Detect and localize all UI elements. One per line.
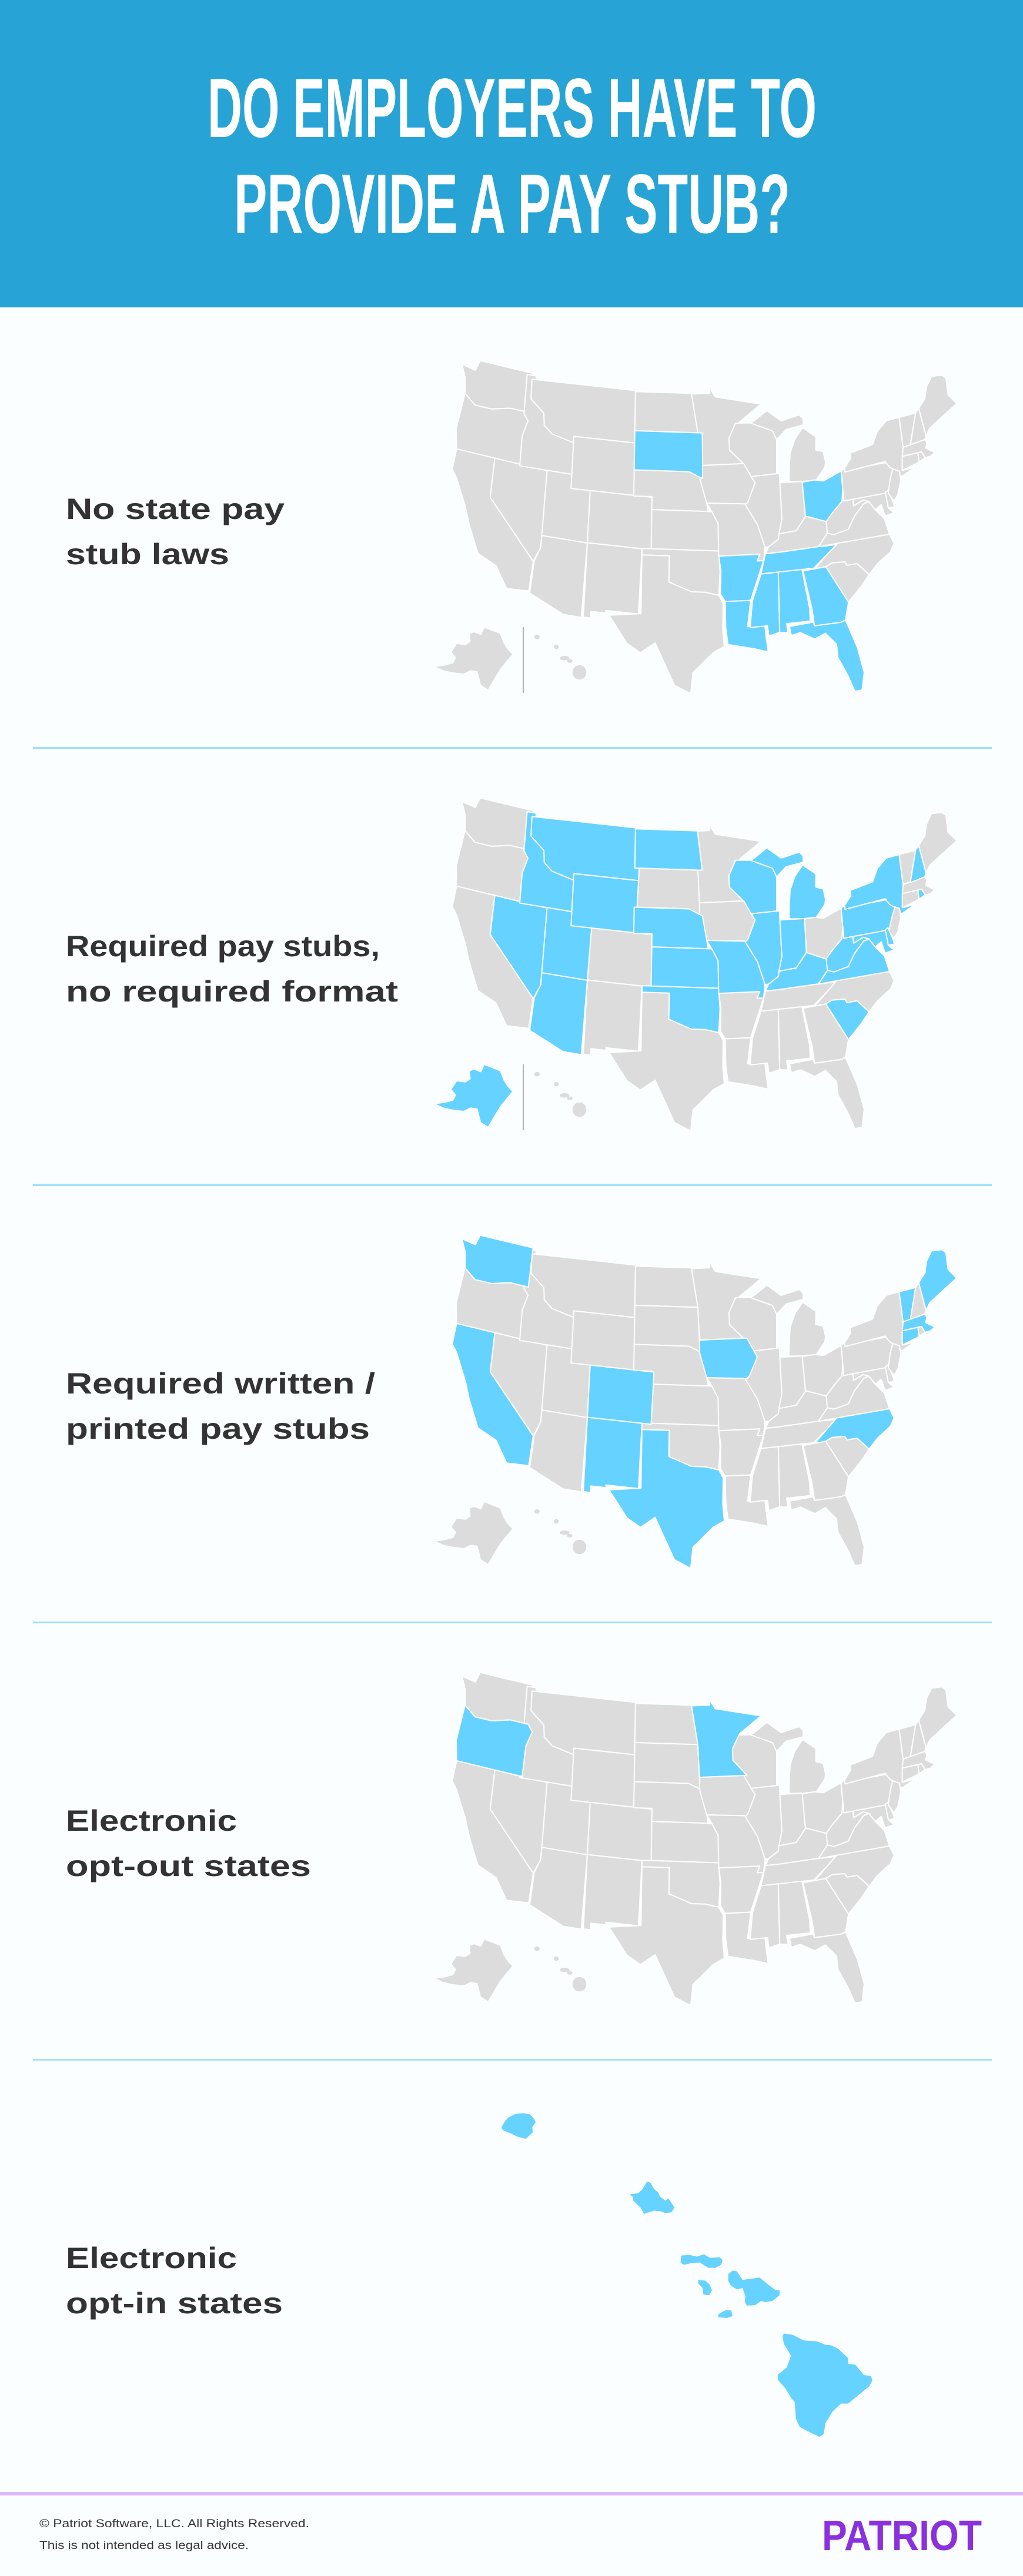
label: no state pay stub laws: No state pay — [66, 493, 285, 525]
logo: patriot: PATRIOT — [822, 2513, 982, 2560]
title — [208, 62, 817, 251]
panel: electronic opt-in states — [66, 2113, 872, 2437]
label: electronic opt-out — [66, 1804, 311, 1882]
label: required written: Required written / — [66, 1367, 375, 1400]
label: no state pay stub laws: stub laws — [66, 538, 229, 571]
map: required, no format — [436, 794, 968, 1140]
footer: copyright: © Patriot Software, LLC. All Rights Reserved. — [39, 2518, 309, 2530]
header banner — [0, 0, 1023, 307]
footer: copyright: This is not intended as legal advice. — [39, 2540, 249, 2552]
panel: required pay stubs, no required format — [66, 794, 968, 1140]
label: no state pay stub laws — [66, 493, 285, 571]
panel: electronic opt-out states — [66, 1669, 968, 2014]
label: electronic opt-out: Electronic — [66, 1804, 237, 1837]
label: required pay stubs: Required pay stubs, — [66, 930, 380, 963]
label: electronic opt-in — [66, 2242, 283, 2320]
map: no state laws — [436, 357, 968, 702]
label: electronic opt-out: opt-out states — [66, 1850, 311, 1882]
footer: copyright — [39, 2518, 309, 2552]
map: hawaii — [502, 2113, 872, 2437]
label: electronic opt-in: opt-in states — [66, 2287, 283, 2320]
label: required written — [66, 1367, 375, 1445]
label: electronic opt-in: Electronic — [66, 2242, 237, 2274]
panel: no state pay stub laws — [66, 357, 968, 702]
label: required pay stubs — [66, 930, 398, 1008]
panel: required written / printed pay stubs — [66, 1231, 968, 1577]
map: required written — [436, 1231, 968, 1577]
label: required pay stubs: no required format — [66, 975, 398, 1008]
map: opt-out — [436, 1669, 968, 2014]
label: required written: printed pay stubs — [66, 1412, 370, 1445]
footer rule — [0, 2492, 1023, 2495]
